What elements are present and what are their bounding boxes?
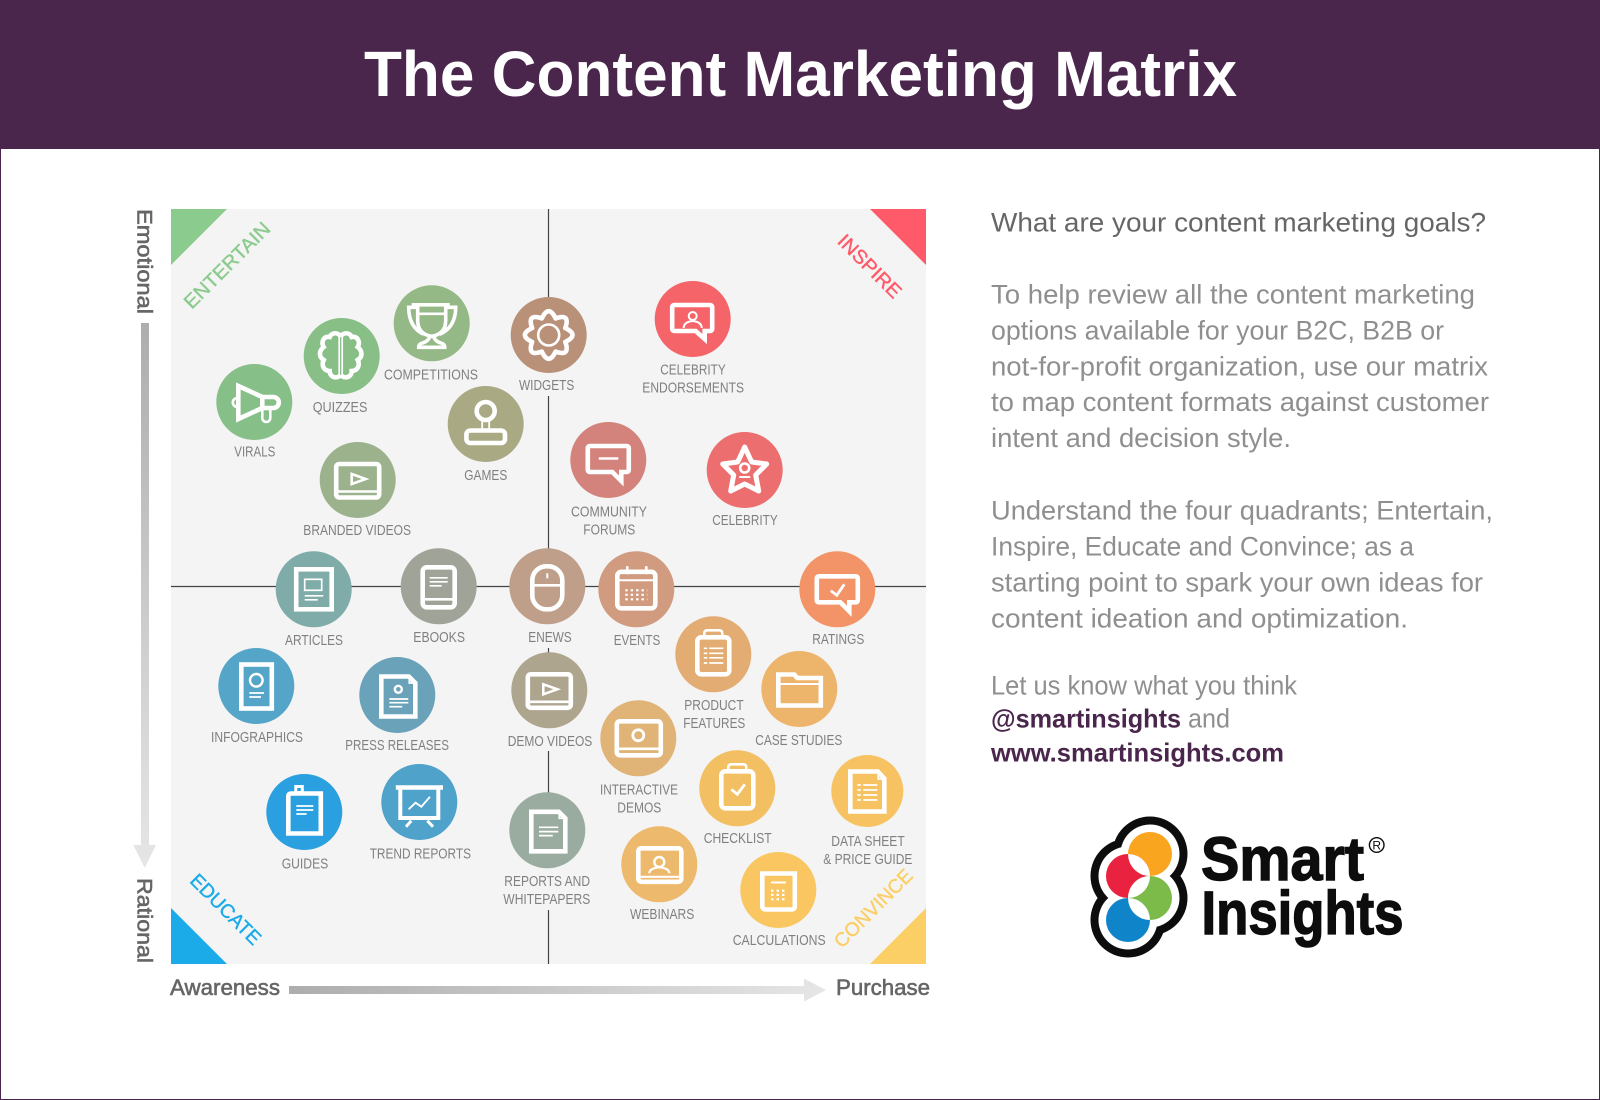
text block: intro paragraph: options available for your B2C, B2B or — [991, 315, 1444, 345]
item: press releases — [345, 657, 449, 754]
item: webinars: WEBINARS — [630, 907, 694, 923]
item: case studies — [755, 651, 842, 749]
header banner — [0, 0, 1600, 149]
logo mark — [1090, 816, 1188, 958]
text block: intro paragraph: To help review all the content marketing — [991, 279, 1475, 309]
item: webinars — [621, 826, 697, 923]
item: interactive demos: INTERACTIVE — [600, 782, 678, 798]
item: guides: GUIDES — [282, 856, 328, 872]
item: virals: VIRALS — [234, 445, 275, 461]
item: branded videos: BRANDED VIDEOS — [303, 523, 411, 539]
item: celebrity: CELEBRITY — [712, 513, 778, 529]
item: widgets — [511, 297, 587, 394]
item: competitions: COMPETITIONS — [384, 367, 478, 383]
text block: intro paragraph: intent and decision style. — [991, 423, 1291, 453]
horizontal axis: awareness to purchase — [170, 975, 930, 1002]
text block: goals heading: What are your content marketing goals? — [991, 208, 1486, 238]
item: reports and whitepapers: WHITEPAPERS — [503, 892, 590, 908]
item: celebrity endorsements: ENDORSEMENTS — [642, 380, 744, 396]
quadrant: inspire: INSPIRE — [833, 230, 906, 303]
item: quizzes — [304, 318, 380, 416]
item: ebooks: EBOOKS — [413, 630, 465, 646]
item: case studies: CASE STUDIES — [755, 733, 842, 749]
item: ratings — [799, 551, 875, 648]
item: branded videos — [303, 442, 411, 539]
item: articles: ARTICLES — [285, 633, 343, 649]
item: calculations: CALCULATIONS — [733, 933, 826, 949]
item: checklist — [699, 750, 775, 847]
text block: quadrants paragraph: Inspire, Educate and Convince; as a — [991, 531, 1415, 561]
item: demo videos: DEMO VIDEOS — [508, 734, 592, 750]
item: events — [598, 551, 674, 649]
title: The Content Marketing Matrix — [364, 38, 1237, 110]
item: data sheet and price guide: DATA SHEET — [831, 834, 905, 850]
text block: contact — [990, 671, 1297, 768]
text block: intro paragraph: not-for-profit organization, use our matrix — [991, 351, 1489, 381]
horizontal axis: awareness to purchase: Awareness — [170, 975, 280, 1000]
item: product features: PRODUCT — [684, 698, 744, 714]
text block: contact: www.smartinsights.com — [990, 738, 1284, 768]
text block: intro paragraph: to map content formats against customer — [991, 387, 1489, 417]
text block: contact: and — [1188, 704, 1230, 734]
item: community forums — [570, 422, 647, 538]
item: reports and whitepapers — [503, 792, 590, 908]
item: product features — [675, 616, 751, 732]
item: trend reports: TREND REPORTS — [370, 846, 471, 862]
item: celebrity — [707, 432, 783, 529]
item: enews: ENEWS — [528, 630, 572, 646]
text block: intro paragraph — [991, 279, 1489, 453]
item: enews — [509, 548, 585, 646]
item: widgets: WIDGETS — [519, 378, 574, 394]
text block: quadrants paragraph: content ideation and optimization. — [991, 603, 1408, 633]
item: articles — [276, 551, 352, 649]
item: community forums: FORUMS — [583, 522, 635, 538]
logo wordmark: R — [1372, 838, 1381, 852]
item: infographics: INFOGRAPHICS — [211, 730, 303, 746]
item: competitions — [384, 285, 478, 383]
logo wordmark: Insights — [1202, 879, 1404, 947]
text block: quadrants paragraph: Understand the four quadrants; Entertain, — [991, 495, 1493, 525]
item: product features: FEATURES — [683, 716, 745, 732]
panel: content matrix — [171, 209, 926, 964]
quadrant: entertain: ENTERTAIN — [180, 218, 275, 313]
item: data sheet and price guide: & PRICE GUIDE — [823, 852, 913, 868]
item: interactive demos: DEMOS — [617, 800, 661, 816]
item: games: GAMES — [464, 468, 507, 484]
item: virals — [216, 364, 292, 461]
item: infographics — [211, 648, 303, 746]
text block: contact: @smartinsights — [991, 704, 1181, 734]
logo: Smart Insights — [1090, 816, 1404, 958]
text block: quadrants paragraph: starting point to spark your own ideas for — [991, 567, 1483, 597]
vertical axis: emotional to rational: Emotional — [132, 209, 156, 314]
vertical axis: emotional to rational — [132, 209, 156, 963]
item: data sheet and price guide — [823, 755, 913, 868]
item: quizzes: QUIZZES — [313, 400, 367, 416]
item: celebrity endorsements: CELEBRITY — [660, 362, 726, 378]
item: reports and whitepapers: REPORTS AND — [504, 874, 590, 890]
item: interactive demos — [600, 700, 678, 816]
text block: quadrants paragraph — [991, 495, 1493, 633]
vertical axis: emotional to rational: Rational — [132, 878, 156, 963]
item: ratings: RATINGS — [812, 632, 864, 648]
item: ebooks — [401, 548, 477, 646]
logo wordmark — [1201, 825, 1404, 947]
item: events: EVENTS — [614, 633, 660, 649]
logo wordmark: Smart — [1201, 825, 1364, 893]
item: games — [448, 386, 524, 484]
item: press releases: PRESS RELEASES — [345, 738, 449, 754]
item: celebrity endorsements — [642, 281, 744, 396]
quadrant: inspire — [833, 209, 926, 303]
quadrant: educate: EDUCATE — [185, 870, 265, 950]
item: checklist: CHECKLIST — [704, 831, 772, 847]
item: trend reports — [370, 764, 471, 862]
horizontal axis: awareness to purchase: Purchase — [836, 975, 930, 1000]
item: guides — [266, 774, 342, 872]
quadrant: convince: CONVINCE — [830, 865, 918, 953]
item: community forums: COMMUNITY — [571, 504, 647, 520]
text block: contact: Let us know what you think — [991, 671, 1297, 701]
item: calculations — [733, 852, 826, 949]
item: demo videos — [508, 652, 592, 750]
